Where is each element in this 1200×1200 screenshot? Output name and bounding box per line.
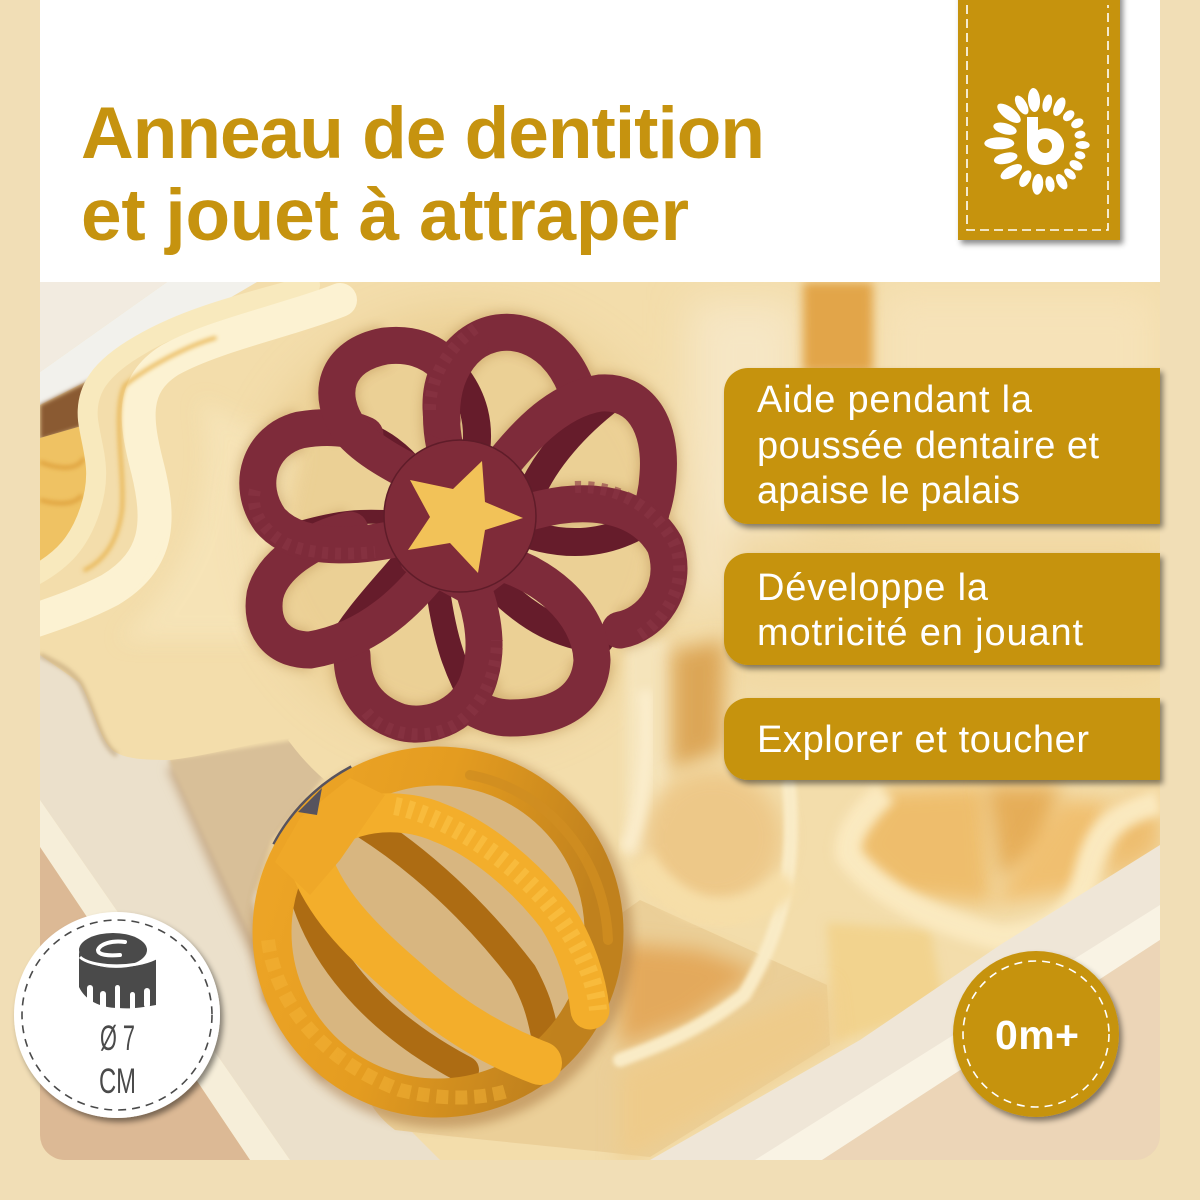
pill 3 xyxy=(724,698,1160,780)
pill 1: Aide pendant la xyxy=(757,379,1033,421)
teething flower toy xyxy=(254,325,679,734)
ring right inner shade xyxy=(470,775,608,940)
size text: Ø 7 xyxy=(100,1019,135,1058)
pill 2: motricité en jouant xyxy=(757,612,1083,654)
pill 1 xyxy=(724,368,1160,524)
box rim bottom right xyxy=(650,845,1160,1160)
top right dark fold xyxy=(803,282,873,372)
right folds xyxy=(620,640,1160,1164)
front band plain xyxy=(307,850,540,1063)
icon: measuring tape xyxy=(79,933,156,1012)
pill 3: Explorer et toucher xyxy=(757,719,1089,761)
age badge: 0m+ xyxy=(995,1012,1079,1058)
size text: CM xyxy=(99,1062,136,1101)
title xyxy=(81,93,765,256)
yellow layers left xyxy=(40,426,86,560)
header panel xyxy=(40,0,1160,282)
main cloth lower left lobe xyxy=(84,692,229,760)
dark notch xyxy=(298,788,322,815)
inner wall left xyxy=(168,740,324,1016)
hub disc xyxy=(384,440,536,592)
bottom centre cloth xyxy=(350,900,830,1157)
back loops xyxy=(300,350,655,705)
front band textured xyxy=(315,813,590,1010)
photo: cloth in wooden box xyxy=(30,282,1160,1164)
cloth hems xyxy=(30,285,340,622)
hub base xyxy=(405,490,510,590)
pill 1: poussée dentaire et xyxy=(757,425,1099,467)
feature pills xyxy=(724,368,1160,780)
title: et jouet à attraper xyxy=(81,175,689,256)
junction xyxy=(275,778,385,895)
teething ball toy xyxy=(268,766,608,1098)
size text xyxy=(99,1019,136,1101)
icon: sunflower logo xyxy=(984,88,1090,195)
cloth near ball top xyxy=(288,739,330,779)
icon: letter b xyxy=(1027,117,1064,165)
pill 2 xyxy=(724,553,1160,665)
size badge xyxy=(14,912,220,1118)
star xyxy=(408,461,523,573)
dark patch xyxy=(275,768,352,845)
petals xyxy=(258,332,669,724)
age badge xyxy=(953,951,1119,1117)
pill 1: apaise le palais xyxy=(757,470,1020,512)
box rim bottom left xyxy=(40,655,440,1160)
textured ridges xyxy=(254,325,679,734)
title: Anneau de dentition xyxy=(81,93,765,174)
ball interior xyxy=(286,780,590,1084)
box top left xyxy=(40,282,257,440)
back bands xyxy=(300,825,545,1070)
soft cloth tones xyxy=(250,290,1160,740)
outer ring xyxy=(272,766,604,1098)
brand tag xyxy=(958,0,1120,240)
toy shadows xyxy=(253,748,633,1128)
pill 2: Développe la xyxy=(757,567,989,609)
lower left ring ridges xyxy=(268,940,510,1098)
